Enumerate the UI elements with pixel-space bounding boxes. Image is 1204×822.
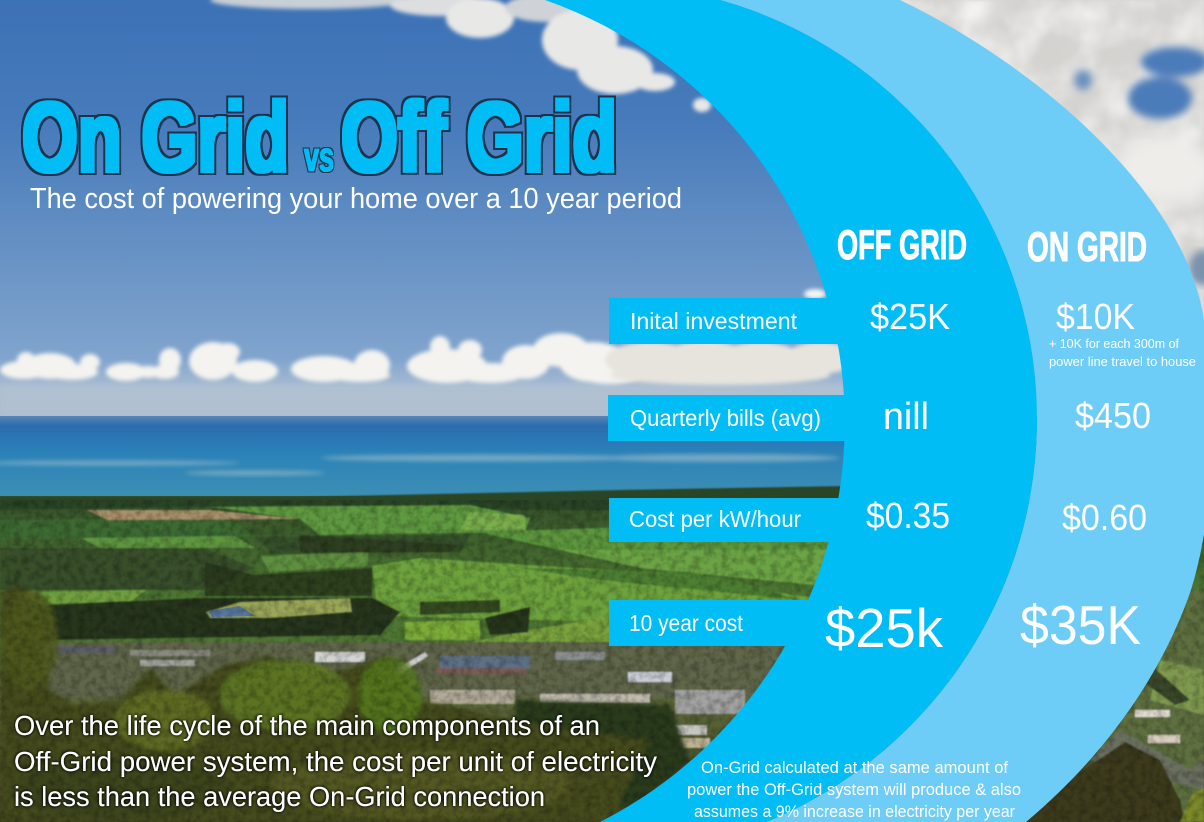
title: Off Grid — [341, 82, 617, 192]
footnote — [687, 758, 1021, 821]
subtitle: The cost of powering your home over a 10 year period — [30, 183, 682, 215]
value: off grid initial: $25K — [870, 296, 950, 337]
clouds: horizon row — [0, 333, 640, 384]
land — [0, 496, 1204, 822]
dark woodland — [32, 535, 530, 640]
footnote: On-Grid calculated at the same amount of — [701, 758, 1008, 777]
fields — [0, 505, 845, 660]
bar: 10 year cost — [609, 600, 819, 646]
heading: off grid: OFF GRID — [837, 221, 967, 268]
value: on grid per kW: $0.60 — [1062, 497, 1147, 538]
summary text — [14, 710, 657, 812]
title: On Grid — [22, 82, 289, 192]
note: power line cost: + 10K for each 300m of — [1049, 336, 1179, 351]
sky — [0, 0, 1204, 417]
title: vs — [304, 133, 334, 180]
clouds: top centre — [210, 0, 711, 112]
panel: off-grid crescent — [545, 0, 1037, 822]
heading: on grid: ON GRID — [1027, 223, 1147, 270]
dark trees beyond town — [515, 700, 690, 810]
clouds: top right — [880, 0, 1204, 330]
town — [40, 642, 840, 748]
note: power line cost — [1049, 336, 1196, 369]
bar: initial investment — [609, 298, 849, 344]
panel: on-grid crescent — [720, 0, 1204, 822]
right side fields and trees — [1020, 590, 1204, 822]
value: on grid 10 year: $35K — [1020, 594, 1141, 656]
note: power line cost: power line travel to house — [1049, 354, 1196, 369]
pond — [206, 598, 352, 618]
footnote: assumes a 9% increase in electricity per year — [694, 802, 1015, 821]
value: off grid per kW: $0.35 — [866, 495, 950, 536]
value: off grid 10 year: $25k — [825, 597, 943, 659]
summary text: is less than the average On-Grid connection — [14, 781, 545, 812]
bar: initial investment: Inital investment — [630, 308, 798, 334]
bar: cost per kW/hour: Cost per kW/hour — [629, 506, 801, 532]
footnote: power the Off-Grid system will produce & also — [687, 780, 1021, 799]
bar: cost per kW/hour — [609, 498, 849, 542]
column: off grid values — [825, 221, 967, 659]
bar: quarterly bills — [608, 395, 848, 441]
title — [22, 82, 617, 192]
clouds: horizon row right of the chart labels — [605, 289, 855, 385]
value: on grid initial: $10K — [1056, 296, 1135, 337]
photo grain — [0, 500, 1204, 822]
value: on grid quarterly: $450 — [1075, 395, 1151, 436]
sea — [0, 416, 1204, 498]
row label bars — [608, 298, 849, 646]
haze above the sea — [0, 385, 1204, 416]
summary text: Over the life cycle of the main components of an — [14, 710, 600, 741]
foreground trees — [0, 585, 650, 822]
bar: quarterly bills: Quarterly bills (avg) — [630, 405, 821, 431]
value: off grid quarterly: nill — [883, 396, 929, 438]
bar: 10 year cost: 10 year cost — [629, 610, 744, 636]
distant forest band — [0, 486, 845, 512]
column: on grid values — [1020, 223, 1196, 656]
summary text: Off-Grid power system, the cost per unit of electricity — [14, 746, 657, 777]
